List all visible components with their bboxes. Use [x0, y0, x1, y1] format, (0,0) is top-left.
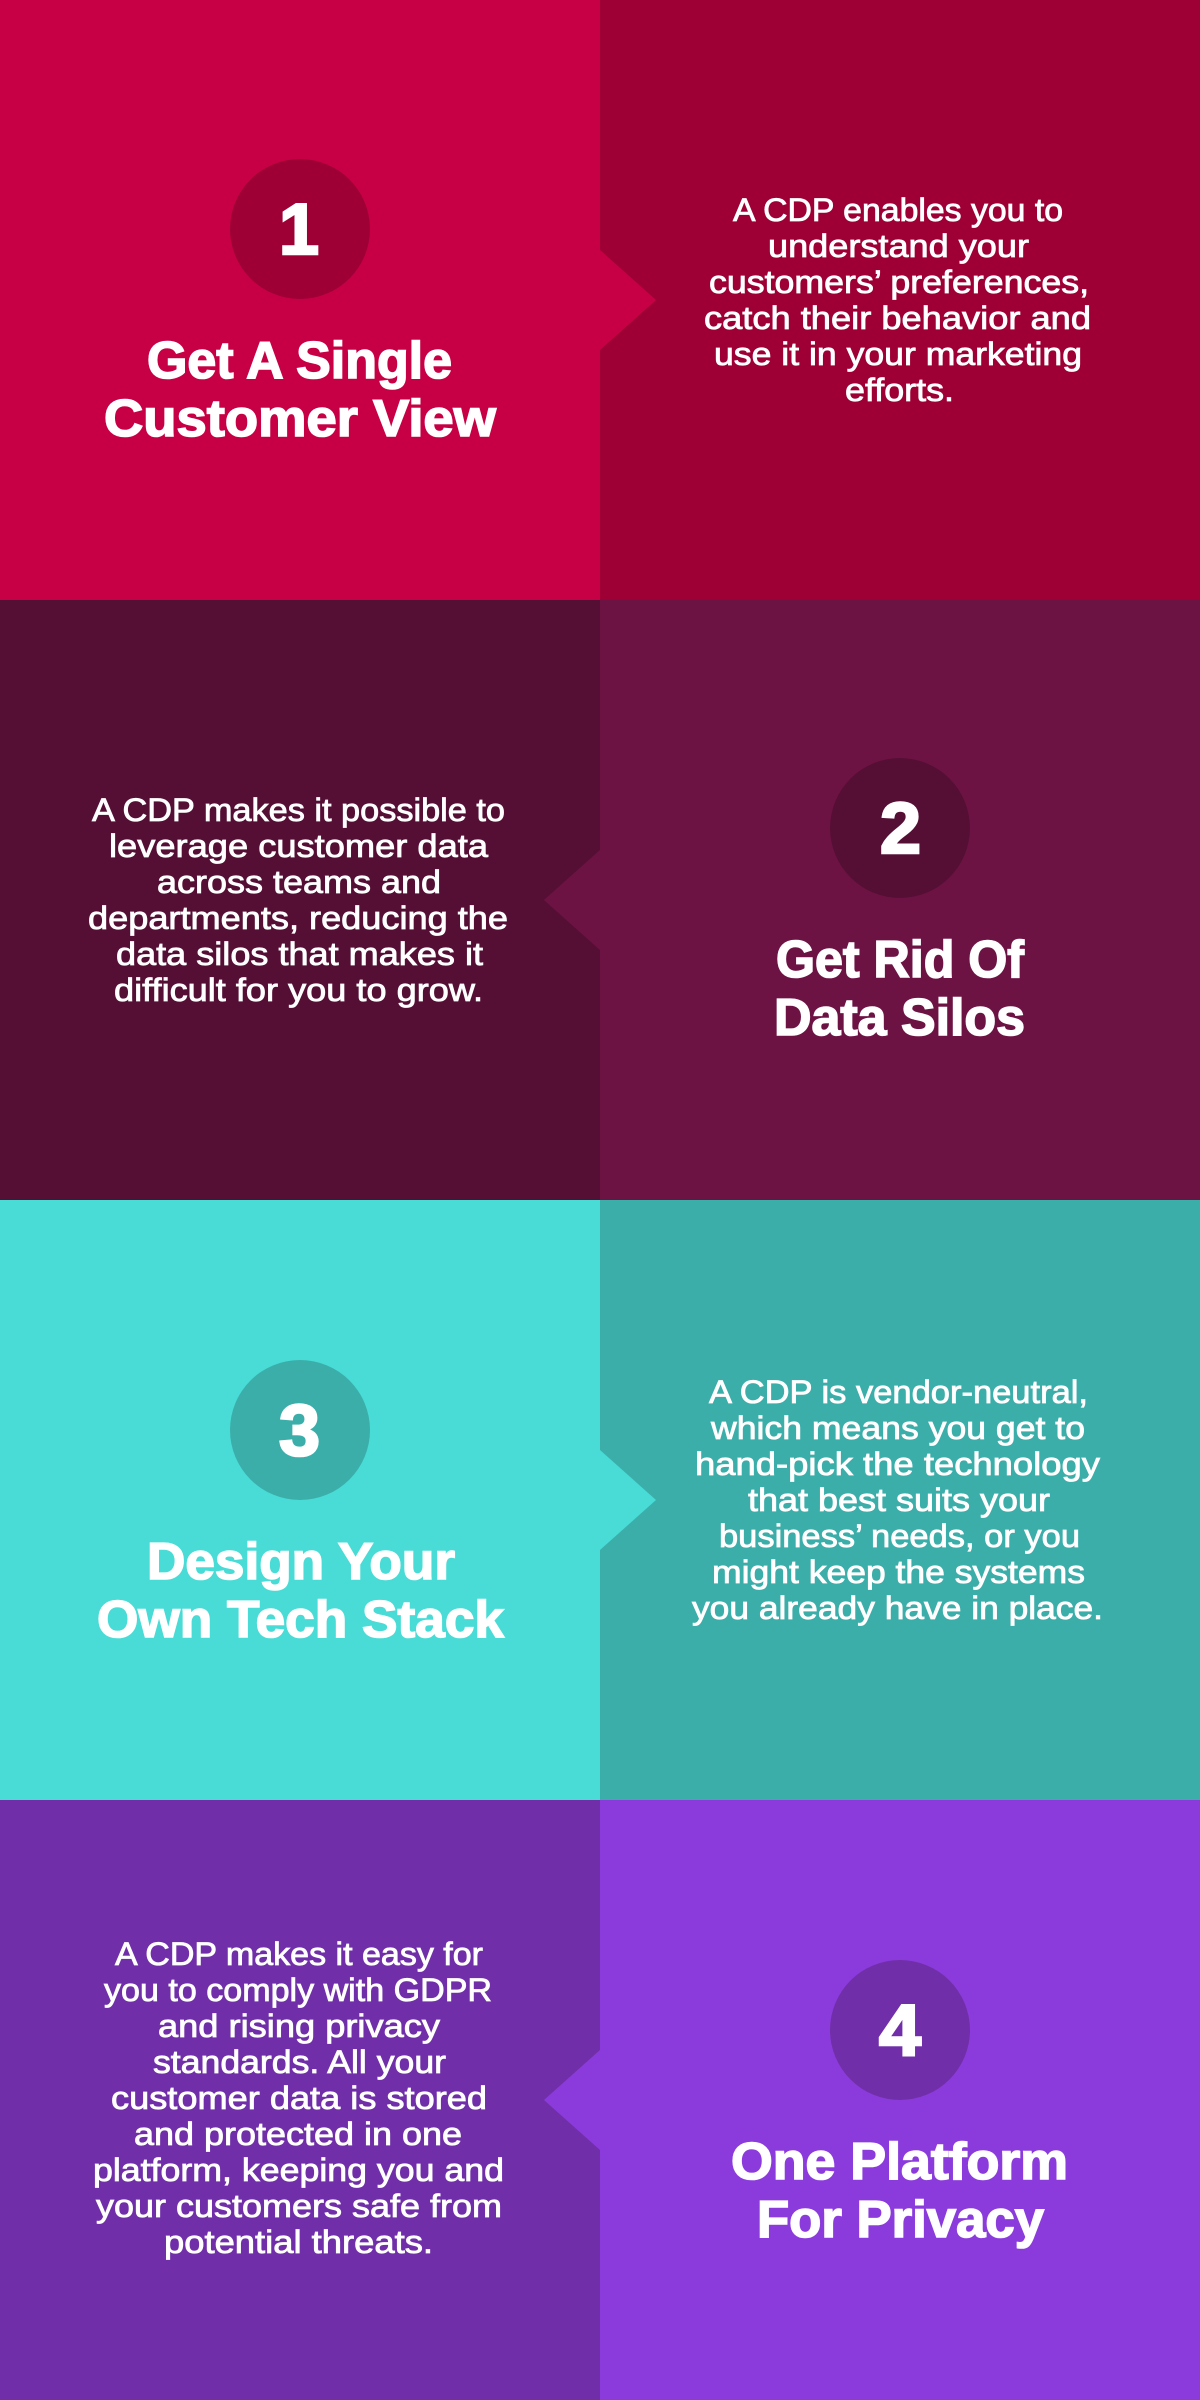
text block: description 1: understand your: [768, 228, 1029, 264]
text block: description 2: difficult for you to grow.: [114, 972, 483, 1008]
text block: description 4: and protected in one: [134, 2116, 462, 2152]
arrow: pointing right 3: [600, 1450, 656, 1550]
text block: description 4: standards. All your: [153, 2044, 446, 2080]
text block: description 3: which means you get to: [710, 1410, 1085, 1446]
number badge 1: [230, 159, 370, 299]
text block: description 3: [692, 1374, 1103, 1626]
text block: description 2: leverage customer data: [109, 828, 488, 864]
panel: 1 get a single customer view: [0, 0, 1200, 600]
number badge 1: 1: [279, 190, 319, 270]
text block: description 2: departments, reducing the: [88, 900, 508, 936]
heading 4: [731, 2133, 1068, 2249]
heading 2: Data Silos: [774, 989, 1025, 1047]
text block: description 4: you to comply with GDPR: [104, 1972, 492, 2008]
text block: description 3: might keep the systems: [712, 1554, 1085, 1590]
text block: description 4: platform, keeping you and: [93, 2152, 504, 2188]
panel background: heading side 3: [0, 1200, 600, 1800]
text block: description 3: that best suits your: [748, 1482, 1050, 1518]
text block: description 1: [704, 192, 1091, 408]
arrow: pointing right 1: [600, 250, 656, 350]
text block: description 4: potential threats.: [164, 2224, 433, 2260]
text block: description 1: use it in your marketing: [714, 336, 1082, 372]
arrow: pointing left 4: [544, 2050, 600, 2150]
panel background: description side 4: [0, 1800, 600, 2400]
number badge 2: [830, 758, 970, 898]
heading 4: One Platform: [731, 2133, 1068, 2191]
text block: description 4: your customers safe from: [96, 2188, 502, 2224]
panel: 4 one platform for privacy: [0, 1800, 1200, 2400]
text block: description 2: across teams and: [157, 864, 441, 900]
panel background: heading side 4: [600, 1800, 1200, 2400]
panel: 3 design your own tech stack: [0, 1200, 1200, 1800]
panel background: heading side 2: [600, 600, 1200, 1200]
text block: description 1: efforts.: [845, 372, 954, 408]
panel background: description side 1: [600, 0, 1200, 600]
text block: description 2: data silos that makes it: [116, 936, 483, 972]
panel background: description side 3: [600, 1200, 1200, 1800]
text block: description 3: hand-pick the technology: [695, 1446, 1100, 1482]
panel background: heading side 1: [0, 0, 600, 600]
number badge 4: 4: [879, 1991, 921, 2071]
heading 1: [104, 332, 497, 448]
text block: description 3: you already have in place.: [692, 1590, 1103, 1626]
heading 2: Get Rid Of: [776, 931, 1025, 989]
panel background: description side 2: [0, 600, 600, 1200]
text block: description 4: [93, 1936, 504, 2260]
number badge 4: [830, 1960, 970, 2100]
text block: description 4: and rising privacy: [158, 2008, 440, 2044]
number badge 2: 2: [880, 789, 921, 869]
text block: description 4: customer data is stored: [111, 2080, 487, 2116]
text block: description 2: A CDP makes it possible to: [92, 792, 505, 828]
heading 3: Own Tech Stack: [97, 1591, 504, 1649]
heading 3: [97, 1533, 504, 1649]
text block: description 3: A CDP is vendor-neutral,: [709, 1374, 1088, 1410]
text block: description 2: [88, 792, 508, 1008]
heading 3: Design Your: [147, 1533, 455, 1591]
text block: description 1: A CDP enables you to: [733, 192, 1063, 228]
arrow: pointing left 2: [544, 850, 600, 950]
panel: 2 get rid of data silos: [0, 600, 1200, 1200]
heading 1: Get A Single: [147, 332, 452, 390]
text block: description 1: customers’ preferences,: [709, 264, 1089, 300]
text block: description 4: A CDP makes it easy for: [115, 1936, 483, 1972]
heading 1: Customer View: [104, 390, 497, 448]
heading 4: For Privacy: [757, 2191, 1044, 2249]
text block: description 1: catch their behavior and: [704, 300, 1091, 336]
heading 2: [774, 931, 1025, 1047]
text block: description 3: business’ needs, or you: [719, 1518, 1080, 1554]
number badge 3: 3: [279, 1391, 320, 1471]
number badge 3: [230, 1360, 370, 1500]
